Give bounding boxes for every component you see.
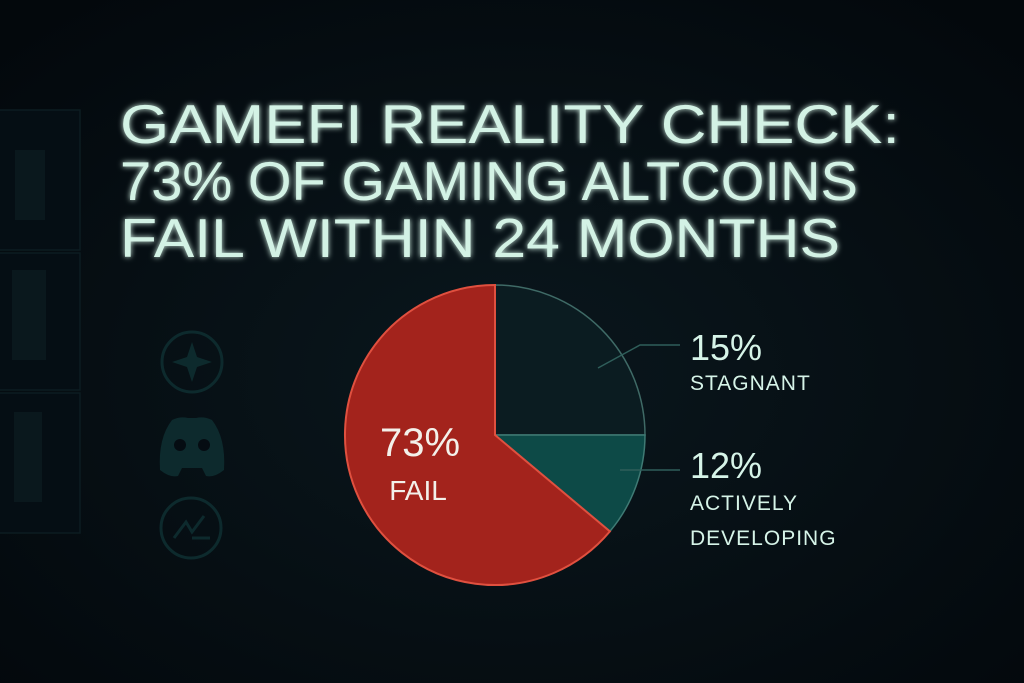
title: FAIL WITHIN 24 MONTHS <box>120 207 840 269</box>
arrow: leader stagnant <box>598 345 680 368</box>
icon: discord <box>160 417 224 476</box>
title: GAMEFI REALITY CHECK: <box>120 93 900 155</box>
slice: stagnant <box>495 285 645 435</box>
label: 73% fail: 73% <box>380 421 460 465</box>
label: 73% fail: FAIL <box>389 475 447 506</box>
slice: actively developing <box>495 435 645 531</box>
label: 12% actively developing <box>690 445 837 550</box>
title <box>120 93 900 269</box>
label: 12% actively developing: ACTIVELY <box>690 492 798 515</box>
pie chart <box>345 285 645 585</box>
icon: star coin <box>162 332 222 392</box>
slice: fail <box>345 285 610 585</box>
label: 15% stagnant: 15% <box>690 327 762 368</box>
label: 15% stagnant: STAGNANT <box>690 372 811 395</box>
label: 12% actively developing: 12% <box>690 445 762 486</box>
icon: chart circle <box>161 498 221 558</box>
label: 15% stagnant <box>690 327 811 395</box>
label: 12% actively developing: DEVELOPING <box>690 527 837 550</box>
label: 73% fail <box>380 421 460 506</box>
arrow: leader developing <box>620 469 680 471</box>
panel: pixel character frames <box>0 110 80 533</box>
title: 73% OF GAMING ALTCOINS <box>120 150 858 212</box>
